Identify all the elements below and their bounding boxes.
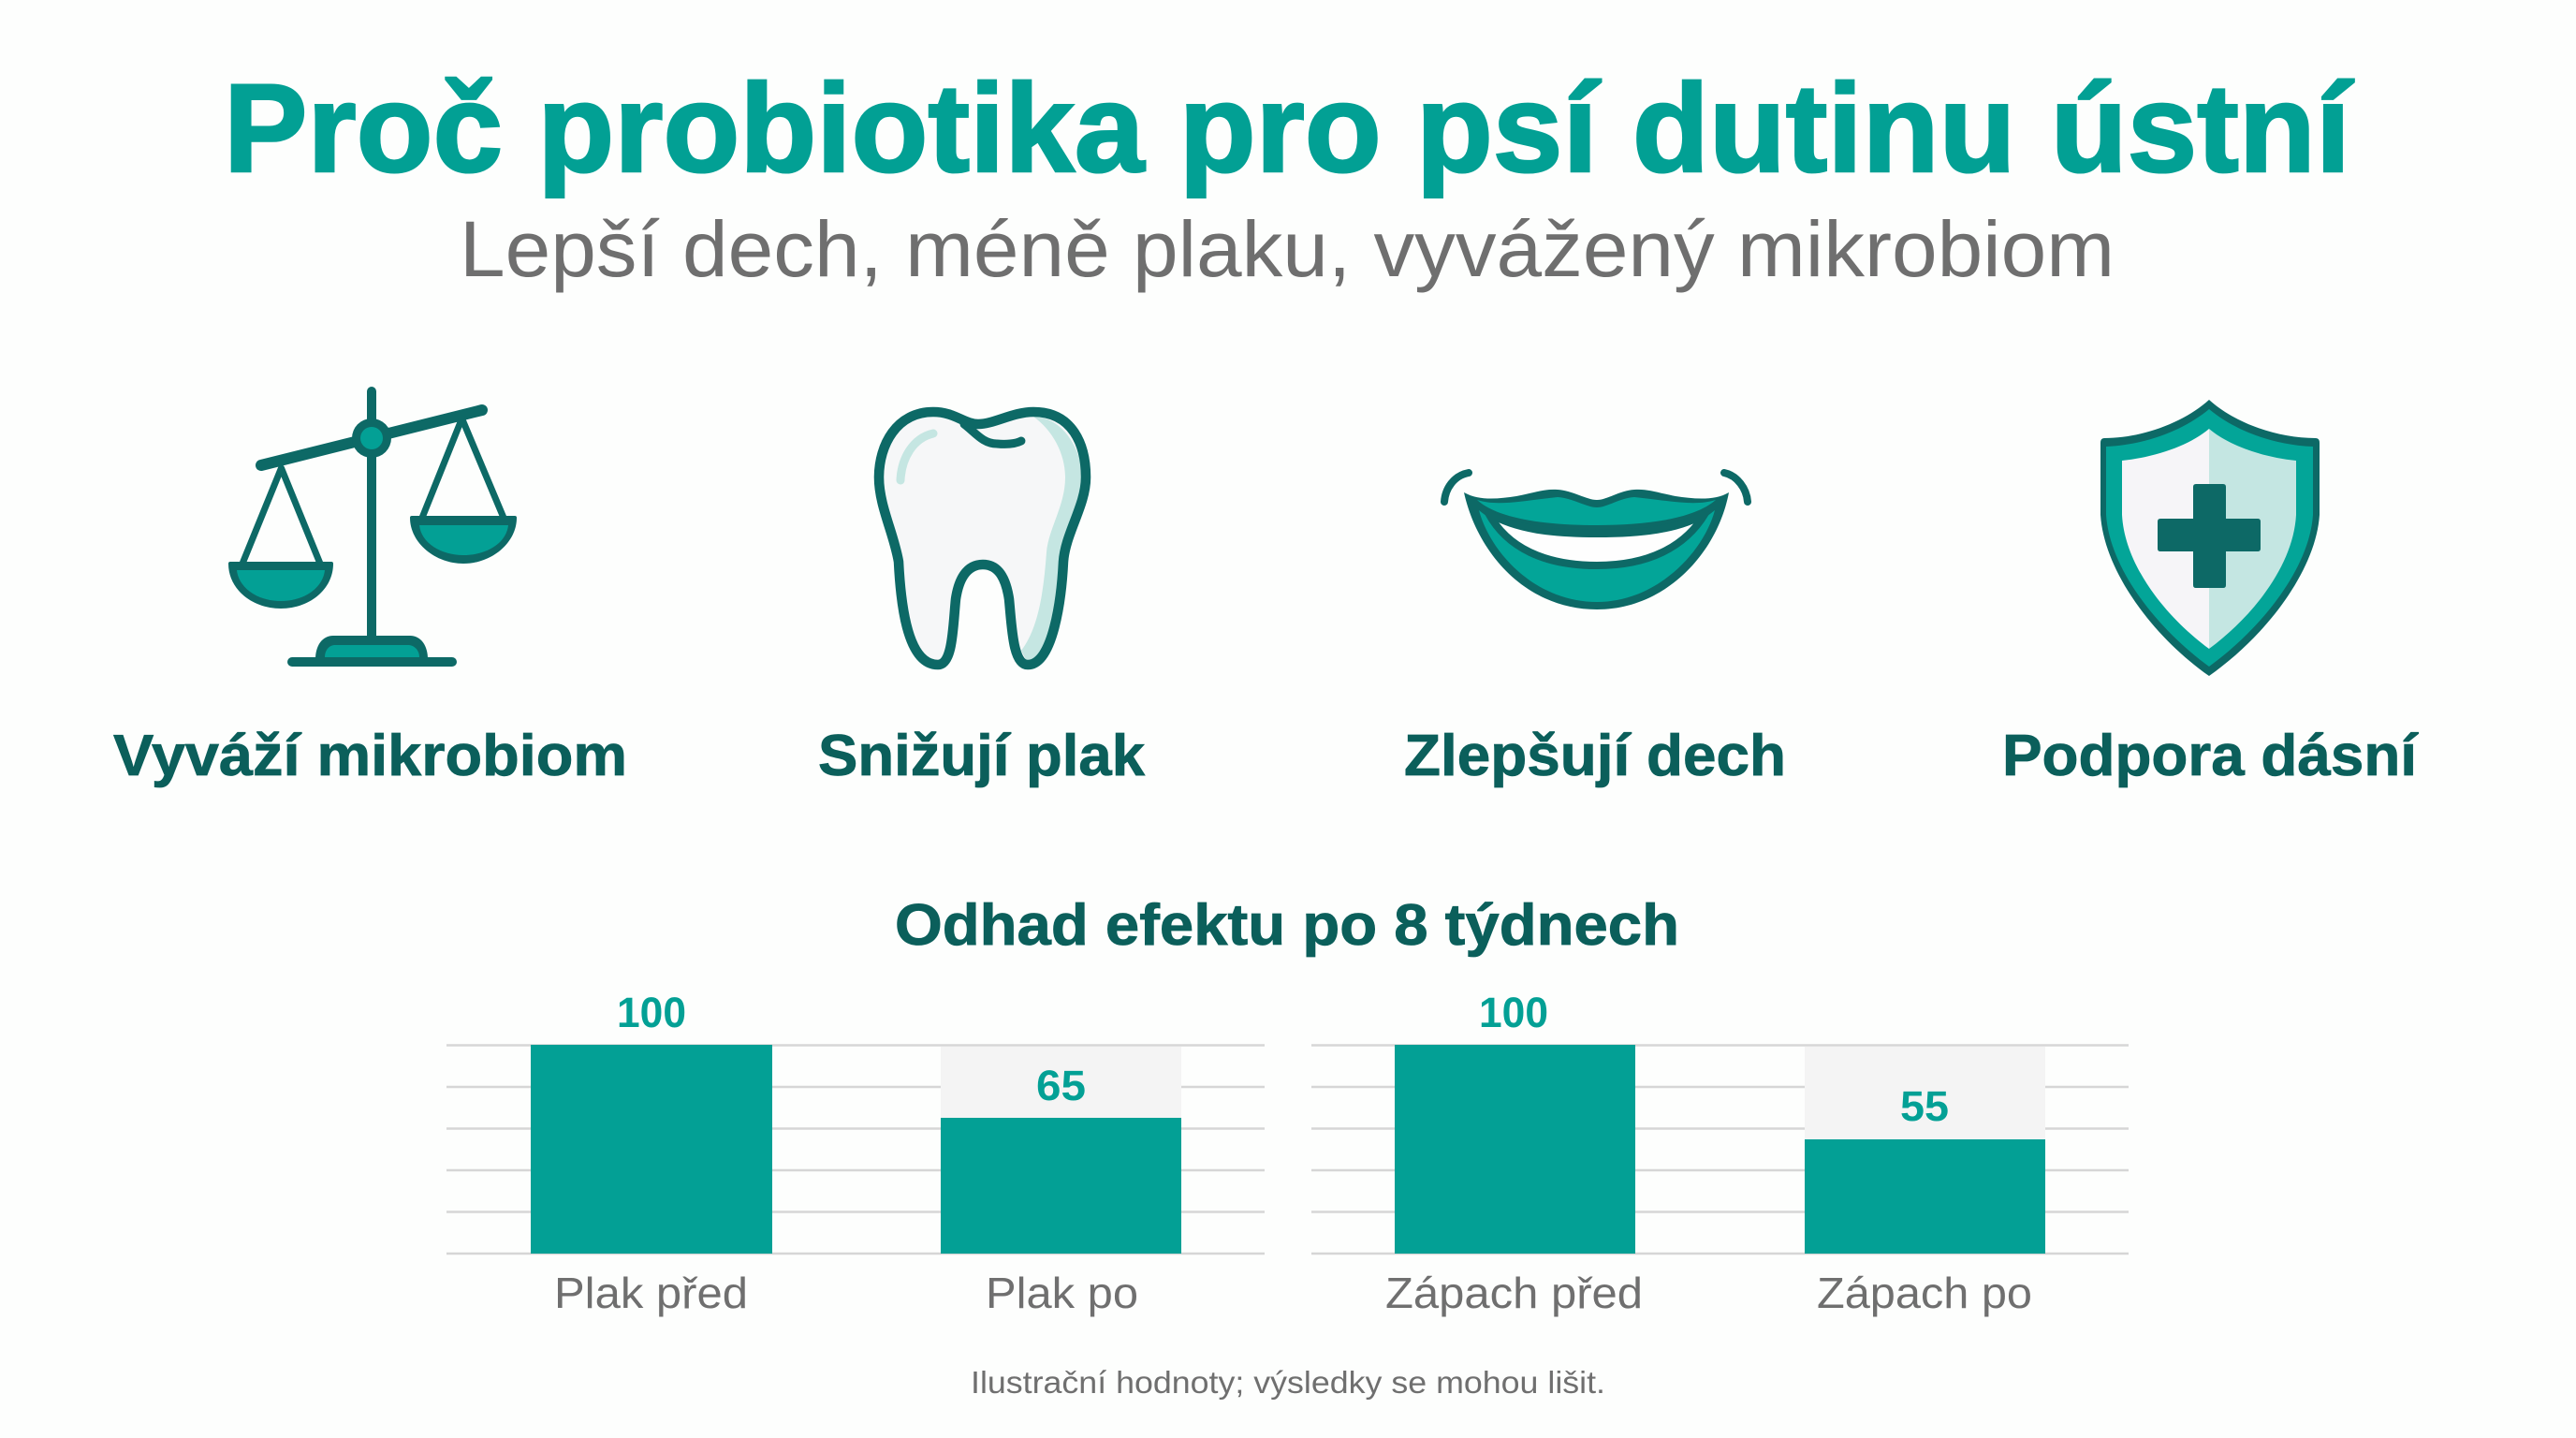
bar: odor after background <box>1805 1047 2045 1139</box>
label: gums: Podpora dásní <box>2002 724 2419 788</box>
axis label: odor after: Zápach po <box>1817 1269 2032 1317</box>
bar: plaque after background <box>941 1047 1181 1118</box>
bar: plaque after <box>941 1118 1181 1254</box>
footnote: Ilustrační hodnoty; výsledky se mohou lišit. <box>971 1365 1605 1400</box>
bar chart: plaque <box>446 989 1265 1317</box>
axis label: plaque after: Plak po <box>986 1269 1138 1317</box>
bar: plaque before <box>531 1045 772 1254</box>
bar chart: odor <box>1311 989 2129 1317</box>
value 55: 55 <box>1900 1082 1949 1130</box>
label: plaque: Snižují plak <box>818 724 1146 788</box>
icon: shield with cross <box>2100 400 2320 676</box>
value 100: 100 <box>617 989 686 1036</box>
label: breath: Zlepšují dech <box>1404 724 1786 788</box>
icon: smile <box>1444 473 1748 609</box>
bar: odor before <box>1395 1045 1635 1254</box>
bar: odor after <box>1805 1139 2045 1254</box>
icon: balance scales <box>228 391 517 667</box>
value 100: 100 <box>1479 989 1548 1036</box>
label: balance: Vyváží mikrobiom <box>113 724 627 788</box>
value 65: 65 <box>1036 1062 1086 1109</box>
axis label: plaque before: Plak před <box>554 1269 748 1317</box>
icon: tooth <box>879 412 1086 665</box>
title: Proč probiotika pro psí dutinu ústní <box>224 59 2354 198</box>
axis label: odor before: Zápach před <box>1385 1269 1643 1317</box>
chart heading: Odhad efektu po 8 týdnech <box>895 893 1679 958</box>
subtitle: Lepší dech, méně plaku, vyvážený mikrobiom <box>460 205 2115 293</box>
